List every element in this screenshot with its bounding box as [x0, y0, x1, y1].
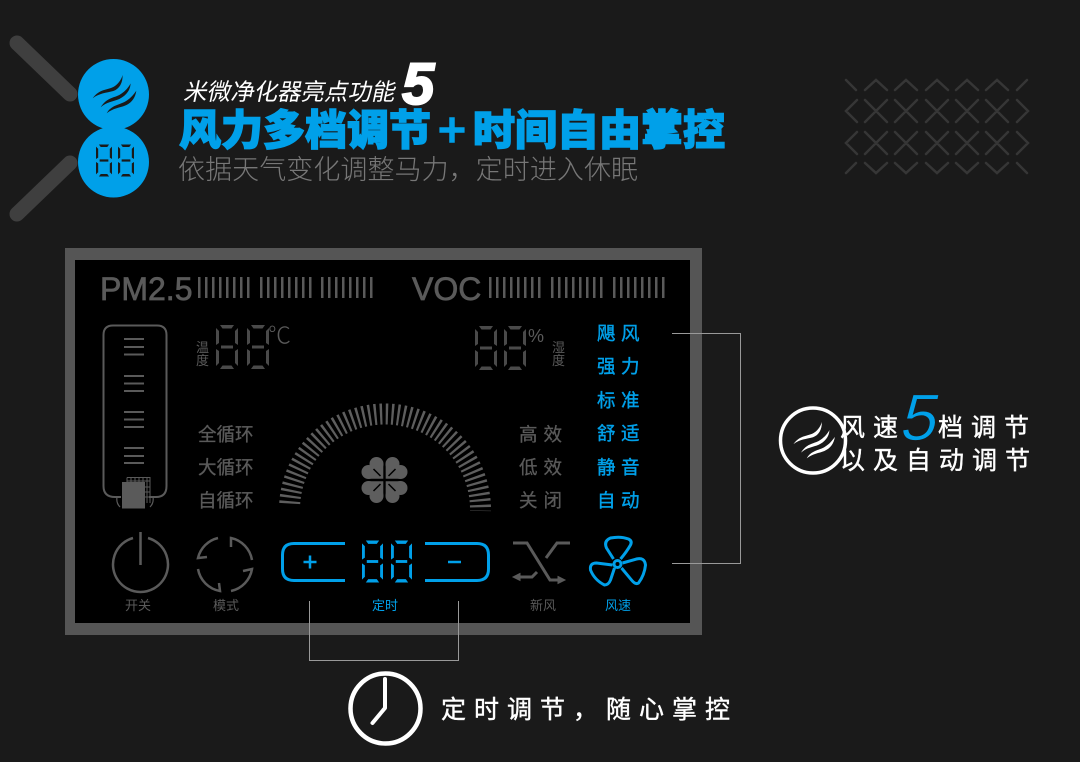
connector: fan speed callout [672, 334, 740, 564]
feature number 5: 5 [402, 52, 435, 117]
fan speed labels: 舒适 [597, 423, 645, 444]
main title: 风力多档调节 [179, 107, 431, 154]
temperature readout [196, 322, 291, 369]
decorative diagonal bars [17, 43, 70, 214]
humidity readout: 度 [552, 353, 565, 368]
fan speed labels: 飓风 [597, 323, 645, 344]
fan speed labels: 静音 [597, 457, 645, 478]
label: fan speed: 风速 [605, 598, 631, 613]
radial gauge [290, 414, 481, 511]
icon: wind badge [78, 59, 149, 130]
filter tank gauge [104, 326, 166, 508]
fan speed labels: 自动 [597, 490, 645, 511]
callout: wind speed: 档调节 [938, 414, 1037, 442]
circulation mode labels: 大循环 [198, 457, 254, 478]
purification mode labels: 关闭 [519, 490, 568, 511]
purification mode labels: 高效 [519, 424, 568, 445]
icon: fan [590, 537, 646, 585]
purification mode labels [519, 424, 568, 511]
panel: control display [65, 248, 702, 635]
VOC meter: VOC [412, 271, 481, 307]
main title: ＋ [435, 113, 469, 151]
label: mode: 模式 [213, 598, 239, 613]
fan speed labels: 强力 [597, 356, 645, 377]
callout: wind speed: 以及自动调节 [840, 447, 1038, 475]
purification mode labels: 低效 [519, 457, 568, 478]
main title: 时间自由掌控 [473, 107, 725, 154]
humidity readout: % [528, 326, 544, 346]
circulation mode labels: 自循环 [198, 490, 254, 511]
circulation mode labels [198, 424, 254, 511]
temperature readout: 度 [196, 353, 209, 368]
timer controls [282, 540, 488, 582]
icon: timer digits badge [78, 126, 149, 198]
label: fresh air: 新风 [530, 598, 556, 613]
callout: wind speed: 风速 [840, 414, 906, 442]
decorative cross pattern [846, 80, 1028, 173]
connector: timer callout [310, 601, 458, 660]
humidity readout: 湿 [552, 340, 565, 355]
main title [179, 107, 725, 154]
label: power: 开关 [125, 598, 151, 613]
fan speed labels [597, 323, 645, 511]
callout: timer [350, 674, 738, 744]
humidity readout [475, 326, 565, 370]
eyebrow heading: 米微净化器亮点功能 [182, 79, 399, 106]
fan speed labels: 标准 [597, 390, 645, 411]
PM2.5 meter: PM2.5 [100, 271, 192, 307]
label: timer: 定时 [372, 598, 398, 613]
callout: wind speed [780, 382, 1038, 475]
icon: fresh air crossing arrows [513, 543, 570, 584]
callout: wind speed: 5 [895, 382, 947, 455]
subtitle: 依据天气变化调整马力，定时进入休眠 [178, 155, 638, 185]
callout: timer: 定时调节，随心掌控 [441, 696, 738, 724]
icon: power button [113, 532, 168, 592]
temperature readout: ℃ [268, 322, 291, 348]
icon: mode arrows [198, 538, 252, 591]
circulation mode labels: 全循环 [198, 424, 254, 445]
icon: clover fan [362, 457, 408, 503]
temperature readout: 温 [196, 340, 209, 355]
